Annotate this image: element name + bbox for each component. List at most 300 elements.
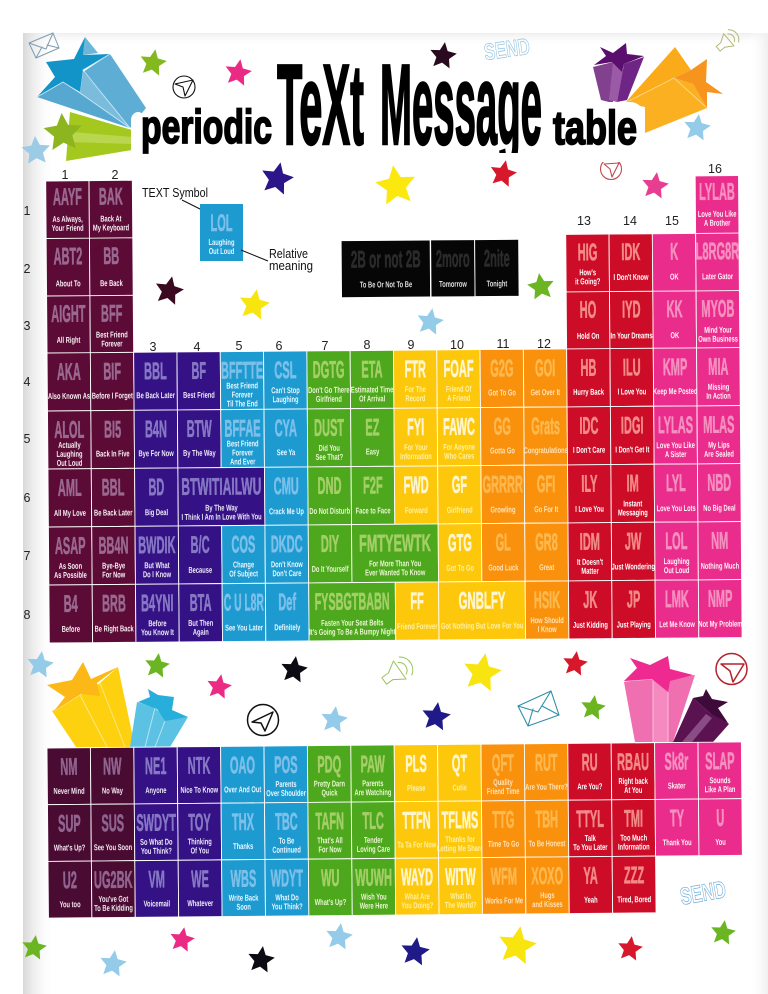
cell: FYI: For Your: [404, 442, 428, 453]
cell: SWDYT: [134, 804, 178, 861]
cell: WUWH: Were Here: [360, 900, 388, 911]
column and row numbers: 6: [24, 491, 31, 505]
cell: BFFAE: Best Friend: [227, 438, 259, 449]
cell: COS: Change: [233, 559, 254, 570]
cell: FTR: [393, 350, 437, 408]
cell: WUWH: [352, 858, 396, 915]
cell: ABT2: [46, 238, 90, 297]
cell: RUT: [524, 743, 568, 801]
cell: DIY: [308, 525, 352, 583]
cell: NM: NM: [711, 527, 728, 554]
cell: WAYD: WAYD: [401, 863, 433, 890]
cell: NM lower: NM: [60, 753, 78, 780]
cell: B4: B4: [64, 590, 78, 617]
cell: BD: Big Deal: [145, 507, 168, 518]
cell: U: U: [716, 804, 724, 831]
cell: WUWH: WUWH: [355, 864, 392, 891]
cell: Sk8r: [655, 742, 698, 799]
cell: NM: Nothing Much: [701, 560, 739, 571]
shooting star: purple: [593, 43, 644, 103]
cell: TLC: TLC: [362, 807, 384, 834]
cell: AAYF: Your Friend: [52, 223, 84, 233]
icon: navigation circle red large: [716, 654, 747, 684]
cell: DND: DND: [317, 472, 342, 499]
cell: LYL: Love You Lots: [657, 503, 696, 514]
column and row numbers: 7: [322, 339, 329, 353]
cell: ILY: [568, 465, 611, 523]
cell: BFFAE: [221, 409, 264, 468]
cell: BFFAE: Forever: [232, 447, 253, 458]
cell: SUS: SUS: [101, 809, 124, 836]
cell: RU: [568, 743, 612, 800]
shooting star: green: [43, 112, 132, 161]
cell: 2B or not 2B: [341, 240, 431, 298]
shooting star: blue: [37, 37, 146, 128]
cell: TBC: [264, 802, 308, 860]
cell: HIG: How's: [579, 267, 596, 278]
cell: FYI: [394, 408, 438, 466]
cell: YA: YA: [583, 862, 598, 889]
cell: SLAP: SLAP: [705, 747, 735, 774]
cell: GG: GG: [494, 413, 511, 440]
cell: TTG: Time To Go: [488, 838, 520, 849]
cell: LMK: LMK: [665, 585, 689, 612]
cell: PLS: [394, 745, 438, 802]
cell: MLAS: My Lips: [708, 439, 730, 450]
cell: BBL second: BBL: [102, 474, 124, 501]
cell: NW: [90, 747, 134, 804]
icon: SEND stamp top: SEND: [482, 33, 531, 65]
cell: BFF: Best Friend: [96, 329, 128, 340]
cell: HIG: [566, 234, 609, 292]
cell: U: [698, 799, 742, 856]
upper table: [46, 176, 743, 643]
cell: TTYL: To You Later: [573, 842, 608, 852]
cell: KMP: Keep Me Posted: [653, 386, 698, 397]
cell: HSIK: How Should: [530, 615, 564, 626]
cell: SUP: What's Up?: [54, 842, 86, 853]
cell: QFT: Friend Time: [487, 786, 519, 797]
cell: Grats: [523, 407, 568, 465]
cell: CSL: [264, 351, 307, 409]
cell: FOAF: FOAF: [443, 355, 474, 382]
cell: BI5: [91, 410, 135, 469]
cell: IDC: IDC: [579, 412, 598, 439]
cell: GNBLFY: Got Nothing But Love For You: [441, 620, 523, 631]
shooting star: pink: [624, 656, 695, 742]
cell: B4: Before: [62, 624, 80, 634]
cell: TFLMS: TFLMS: [441, 806, 478, 833]
cell: TY: TY: [670, 804, 684, 831]
cell: TTG: TTG: [492, 806, 514, 833]
cell: OAO: OAO: [230, 751, 255, 779]
cell: FYSBGTBABN: It's Going To Be A Bumpy Night: [309, 626, 396, 637]
cell: GR8: Great: [539, 562, 555, 572]
cell: IDGI: I Don't Get It: [615, 444, 650, 455]
cell: BIF: BIF: [103, 358, 121, 385]
cell: TTFN: [395, 801, 439, 858]
column and row numbers: 8: [24, 608, 31, 622]
cell: GFI: Go For It: [534, 504, 559, 515]
cell: WDYT: [265, 859, 309, 916]
cell: FMTYEWTK: FMTYEWTK: [359, 529, 431, 557]
cell: QFT: [481, 744, 525, 801]
cell: QT: QT: [452, 749, 468, 777]
cell: IDM: [568, 523, 612, 581]
cell: GL: GL: [495, 529, 511, 556]
cell: ETA: ETA: [361, 356, 383, 383]
cell: BI5: Back In Five: [96, 448, 130, 459]
cell: BRB: [92, 584, 136, 643]
cell: SUP: SUP: [58, 810, 81, 837]
cell: BWDIK: BWDIK: [138, 531, 176, 558]
cell: GL: Good Luck: [488, 562, 519, 573]
cell: ALOL: Out Loud: [57, 458, 82, 468]
cell: IM: Messaging: [618, 507, 648, 518]
cell: AAYF: As Always,: [52, 214, 83, 224]
cell: WE: WE: [191, 865, 209, 892]
cell: K: OK: [670, 271, 679, 282]
cell: RBAU: RBAU: [617, 748, 649, 775]
cell: IDK: [609, 234, 653, 292]
cell: BF: [177, 352, 221, 410]
cell: BTWITIAILWU: BTWITIAILWU: [181, 472, 261, 500]
cell: TMI: TMI: [624, 805, 643, 832]
cell: KK: OK: [670, 330, 680, 340]
cell: SUP: [47, 804, 91, 861]
cell: IM: [611, 464, 655, 523]
cell: ZZZ: Tired, Bored: [617, 894, 651, 905]
cell: AAYF: AAYF: [53, 183, 82, 210]
cell: ILU: ILU: [623, 353, 641, 381]
cell: BFFAE: And Ever: [230, 456, 256, 467]
cell: K: K: [670, 238, 679, 265]
shooting star: cyan: [130, 689, 188, 747]
legend: text symbol key: TEXT Symbol: [142, 186, 208, 200]
title: periodic: [141, 100, 272, 153]
column and row numbers: 5: [236, 339, 243, 353]
cell: Sk8r: Skater: [668, 780, 686, 791]
cell: FOAF: A Friend: [447, 392, 470, 403]
cell: HSIK: [525, 581, 569, 639]
cell: MIA: In Action: [706, 390, 731, 401]
cell: BD: BD: [148, 473, 164, 500]
cell: GR8: [525, 523, 568, 581]
cell: ILU: I Love You: [618, 386, 646, 397]
cell: NE1: NE1: [145, 752, 167, 779]
cell: IDK: I Don't Know: [613, 272, 649, 282]
cell: AKA: AKA: [57, 358, 81, 385]
cell: BB4N: For Now: [102, 569, 126, 580]
shooting star: yellow: [47, 662, 135, 747]
cell: OAO: Over And Out: [224, 784, 262, 795]
cell: KMP: [653, 348, 698, 406]
cell: BI5: BI5: [104, 416, 121, 443]
cell: GNBLFY: GNBLFY: [458, 587, 506, 614]
cell: SWDYT: You Think?: [141, 845, 172, 856]
cell: EZ: [351, 408, 394, 467]
cell: B4N: [134, 410, 178, 468]
cell: LYLAB: LYLAB: [699, 178, 735, 205]
cell: IDC: [567, 407, 611, 465]
cell: BTA: Again: [193, 627, 209, 637]
cell: TOY: [178, 803, 222, 860]
cell: L8RG8R: L8RG8R: [696, 237, 740, 265]
cell: DKDC: Don't Care: [272, 568, 301, 579]
cell: WU: [308, 859, 352, 916]
cell: DUST: See That?: [316, 451, 344, 462]
cell: THX: [221, 803, 265, 860]
cell: FYI: Information: [400, 451, 432, 462]
cell: NE1: [134, 747, 178, 804]
cell: LYLAB: Love You Like: [698, 208, 736, 219]
cell: NW: No Way: [102, 785, 123, 796]
cell: FF: FF: [410, 587, 424, 614]
cell: BTW: BTW: [187, 415, 212, 442]
cell: TFLMS: [437, 801, 484, 858]
cell: PLS: PLS: [405, 750, 427, 777]
cell: GG: [480, 407, 524, 466]
cell: TFLMS: Thanks for: [445, 834, 475, 845]
cell: BTA: [179, 584, 223, 642]
cell: MYOB: MYOB: [701, 295, 735, 322]
cell: HIG: HIG: [578, 238, 597, 265]
cell: FF: [395, 582, 439, 640]
cell: BAK: [89, 180, 133, 239]
cell: JW: [611, 522, 655, 581]
cell: BTWITIAILWU: I Think I Am In Love With You: [181, 511, 262, 522]
cell: WDYT: What Do: [275, 892, 299, 903]
cell: GRRRR: Growling: [490, 504, 515, 515]
cell: TBH: To Be Honest: [529, 838, 566, 849]
cell: BBL: [134, 352, 177, 410]
cell: MLAS: MLAS: [703, 411, 735, 438]
cell: C U L8R: See You Later: [225, 622, 263, 633]
cell: GG: Gotta Go: [490, 445, 515, 456]
cell: LYLAS: LYLAS: [658, 411, 693, 438]
cell: BTA: But Then: [188, 618, 213, 628]
cell: TTG: [481, 801, 525, 858]
cell: GOI: GOI: [535, 354, 555, 381]
cell: WU: What's Up?: [315, 897, 347, 907]
cell: RBAU: At You: [624, 785, 642, 795]
cell: BIF: Before I Forget: [92, 390, 133, 401]
cell: SWDYT: SWDYT: [136, 809, 177, 836]
cell: UG2BK: [91, 861, 135, 918]
cell: WAYD: What Are: [405, 891, 430, 902]
cell: CMU: CMU: [274, 472, 299, 499]
cell: WE: Whatever: [187, 898, 213, 909]
cell: BRB: BRB: [102, 590, 126, 617]
cell: DND: Do Not Disturb: [309, 505, 351, 516]
cell: UG2BK: UG2BK: [94, 866, 133, 893]
cell: MIA: Missing: [708, 381, 729, 392]
cell: IDC: I Don't Care: [573, 444, 605, 455]
cell: Grats: Congratulations: [524, 445, 568, 456]
cell: DKDC: [265, 525, 309, 583]
cell: FF: Friend Forever: [397, 621, 438, 632]
cell: BTWITIAILWU: By The Way: [205, 502, 238, 513]
cell: Def: [265, 583, 309, 641]
cell: COS: Of Subject: [229, 568, 259, 579]
cell: DKDC: Don't Know: [271, 559, 303, 570]
cell: LYLAB: A Brother: [704, 217, 731, 228]
cell: AIGHT: AIGHT: [51, 300, 86, 327]
cell: XOXO: XOXO: [531, 862, 563, 889]
cell: DGTG: Girlfriend: [316, 393, 342, 404]
cell: COS: [222, 525, 265, 584]
cell: IDGI: [610, 406, 654, 465]
cell: WBS: Soon: [236, 901, 251, 912]
cell: CYA: See Ya: [277, 447, 296, 458]
column and row numbers: 1: [62, 168, 69, 182]
cell: MYOB: Own Business: [698, 333, 738, 344]
cell: WDYT: WDYT: [270, 864, 304, 892]
cell: L8RG8R: [696, 233, 740, 291]
icon: speaker green: [378, 653, 417, 690]
cell: RU: RU: [582, 748, 598, 775]
cell: TY: Thank You: [663, 837, 692, 848]
cell: KMP: KMP: [663, 353, 687, 380]
cell: QT: Cutie: [452, 782, 467, 793]
cell: THX: THX: [232, 808, 254, 835]
cell: VM: [135, 860, 179, 917]
column and row numbers: 11: [497, 337, 510, 351]
cell: BB: BB: [103, 242, 119, 269]
cell: BAK: My Keyboard: [93, 222, 129, 233]
cell: TAFN: For Now: [318, 844, 342, 855]
cell: BWDIK: But What: [144, 560, 170, 571]
cell: AIGHT: All Right: [57, 335, 81, 345]
icon: speaker top right: [713, 27, 742, 55]
column and row numbers: 1: [24, 204, 31, 218]
cell: HO: HO: [580, 296, 596, 323]
cell: PAW: Parents: [362, 778, 383, 789]
cell: TAFN: That's All: [317, 835, 343, 846]
legend: text symbol key: meaning: [269, 259, 313, 273]
cell: QT: [438, 744, 481, 801]
column and row numbers: [24, 162, 722, 622]
column and row numbers: 12: [537, 337, 551, 351]
cell: OAO: [221, 746, 264, 803]
cell: DUST: [307, 409, 351, 467]
cell: WITW: WITW: [445, 863, 476, 890]
cell: U2: U2: [63, 866, 77, 893]
cell: B4YNI: [135, 584, 179, 642]
cell: F2F: Face to Face: [356, 505, 391, 516]
cell: UG2BK: To Be Kidding: [94, 902, 133, 913]
cell: Sk8r: Sk8r: [664, 748, 689, 775]
cell: TBH: TBH: [535, 805, 558, 833]
shooting star: orange: [625, 47, 723, 133]
cell: YA: Yeah: [584, 894, 598, 905]
cell: NE1: Anyone: [145, 785, 166, 795]
cell: B/C: B/C: [191, 531, 210, 558]
cell: FAWC: Who Cares: [444, 450, 474, 461]
cell: BTWITIAILWU: [178, 467, 265, 526]
cell: MYOB: Mind Your: [704, 324, 732, 335]
cell: GRRRR: [481, 465, 525, 524]
cell: MLAS: Are Sealed: [704, 448, 734, 459]
cell: LYL: [654, 464, 698, 522]
cell: LMK: Let Me Know: [659, 619, 695, 630]
cell: Def: Definitely: [274, 622, 300, 633]
icon: SEND stamp bottom: SEND: [678, 876, 728, 911]
cell: ETA: Of Arrival: [359, 393, 385, 404]
cell: VM: Voicemail: [144, 898, 170, 909]
cell: ABT2: ABT2: [53, 242, 82, 270]
cell: AML: [48, 469, 92, 527]
cell: DND: [308, 467, 352, 525]
cell: CMU: Crack Me Up: [269, 506, 304, 517]
cell: SUS: [91, 804, 135, 861]
cell: HB: Hurry Back: [573, 386, 605, 397]
cell: AIGHT: [47, 296, 90, 354]
cell: BFF: Forever: [101, 338, 123, 349]
cell: TBC: Continued: [272, 844, 301, 855]
legend: text symbol key: LOL: [210, 209, 233, 236]
cell: BFFTTE: Forever: [232, 389, 253, 400]
cell: LOL: Out Loud: [664, 565, 689, 576]
cell: PAW: Are Watching: [354, 787, 391, 798]
cell: U: You: [715, 837, 726, 847]
cell: KK: KK: [667, 295, 683, 322]
cell: CYA: CYA: [275, 414, 297, 441]
icon: envelope top left: [29, 33, 59, 58]
cell: ALOL: [48, 411, 91, 469]
cell: POS: [264, 746, 308, 803]
cell: B4YNI: B4YNI: [141, 589, 174, 616]
cell: 2nite: Tonight: [487, 278, 508, 289]
cell: JW: JW: [625, 527, 642, 555]
cell: LOL: Laughing: [664, 556, 690, 567]
cell: TOY: Of You: [191, 845, 209, 856]
cell: BB: [89, 238, 133, 296]
cell: GNBLFY: [439, 581, 526, 640]
cell: JW: Just Wondering: [612, 561, 655, 572]
cell: TMI: Information: [618, 841, 650, 852]
cell: EZ: Easy: [366, 446, 379, 457]
cell: AKA: Also Known As: [48, 390, 90, 401]
cell: WDYT: You Think?: [272, 901, 303, 912]
legend: text symbol key: Relative: [269, 247, 308, 261]
cell: ETA: [350, 350, 394, 409]
cell: TLC: Tender: [364, 835, 383, 845]
cell: IM: IM: [626, 470, 639, 497]
cell: RU: Are You?: [577, 781, 603, 792]
cell: ASAP: [48, 527, 92, 585]
cell: NBD: No Big Deal: [703, 502, 736, 513]
cell: LOL: [655, 522, 698, 580]
cell: 2nite: 2nite: [484, 245, 510, 272]
cell: SLAP: [698, 742, 742, 799]
cell: XOXO: [525, 857, 569, 914]
cell: TBC: To Be: [279, 835, 294, 846]
cell: HB: [567, 349, 610, 407]
cell: B4N: B4N: [145, 415, 167, 442]
cell: DGTG: DGTG: [313, 356, 345, 383]
cell: DKDC: DKDC: [271, 530, 303, 557]
cell: YA: [569, 856, 613, 914]
cell: WBS: [222, 860, 265, 917]
cell: K: [652, 233, 696, 292]
cell: TY: [655, 799, 699, 856]
cell: FMTYEWTK: For More Than You: [369, 558, 421, 569]
cell: B/C: Because: [188, 565, 212, 575]
cell: NTK: Nice To Know: [180, 784, 218, 795]
cell: JP: JP: [627, 586, 640, 613]
cell: ASAP: As Soon: [59, 561, 82, 571]
